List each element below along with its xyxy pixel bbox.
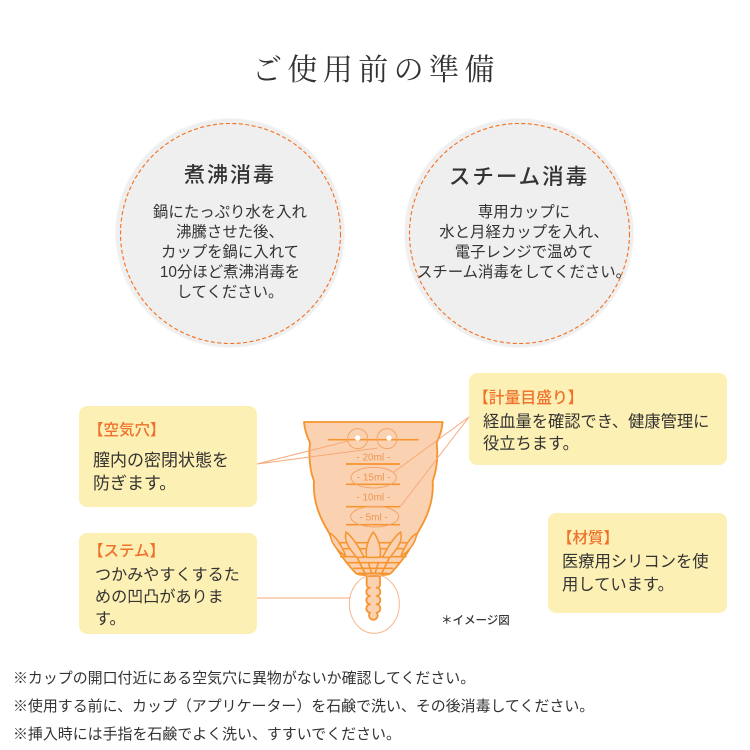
- measurement ovals: [351, 467, 399, 527]
- text: measurement description: 役立ちます。: [483, 435, 579, 453]
- text: air holes description: 膣内の密閉状態を: [93, 451, 229, 470]
- volume labels: - 10ml -: [356, 493, 390, 504]
- label: material: 【材質】: [557, 530, 619, 547]
- text: material description: 医療用シリコンを使: [562, 553, 709, 571]
- text: steam instructions: 専用カップに: [478, 204, 570, 221]
- volume labels: - 20ml -: [356, 453, 390, 464]
- stem: [366, 576, 380, 620]
- label: stem: 【ステム】: [88, 543, 165, 560]
- text: measurement description: 経血量を確認でき、健康管理に: [483, 413, 709, 431]
- text: steam instructions: 水と月経カップを入れ、: [439, 224, 609, 241]
- text: steam instructions: 電子レンジで温めて: [455, 244, 593, 261]
- volume marks: [328, 440, 419, 525]
- text: stem description: めの凹凸がありま: [95, 588, 224, 606]
- text: air holes description: [93, 451, 229, 493]
- title: ご使用前の準備: [252, 54, 500, 87]
- volume labels: [356, 453, 391, 524]
- text: boiling instructions: カップを鍋に入れて: [161, 244, 299, 261]
- text: boiling instructions: してください。: [177, 284, 283, 301]
- note 3: ※挿入時には手指を石鹸でよく洗い、すすいでください。: [13, 726, 401, 743]
- text: steam instructions: スチーム消毒をしてください。: [417, 264, 631, 281]
- text: boiling instructions: 鍋にたっぷり水を入れ: [153, 204, 307, 221]
- text: material description: 用しています。: [562, 576, 674, 594]
- text: measurement description: [483, 412, 709, 453]
- panel: boiling disinfection: [116, 119, 344, 347]
- panel: measurement marks: [469, 373, 727, 465]
- panel: air holes: [79, 406, 257, 507]
- grip rings: [340, 543, 407, 573]
- volume labels: - 15ml -: [357, 473, 391, 484]
- heading: boiling disinfection: 煮沸消毒: [184, 164, 276, 187]
- panel: material: [548, 513, 727, 613]
- text: boiling instructions: [153, 204, 307, 301]
- text: boiling instructions: 10分ほど煮沸消毒を: [160, 264, 300, 281]
- notes: [13, 670, 594, 743]
- text: boiling instructions: 沸騰させた後、: [176, 224, 284, 241]
- label: measurement marks: 【計量目盛り】: [473, 390, 584, 407]
- text: stem description: つかみやすくするた: [95, 566, 240, 584]
- stem oval: [349, 575, 399, 633]
- panel: steam disinfection: [405, 119, 633, 347]
- note 1: ※カップの開口付近にある空気穴に異物がないか確認してください。: [13, 670, 475, 687]
- leader lines: [257, 417, 469, 598]
- panel: stem: [79, 533, 257, 634]
- grip petals: [330, 532, 417, 557]
- cup body: [304, 422, 443, 575]
- text: material description: [562, 552, 709, 594]
- text: steam instructions: [417, 204, 631, 281]
- text: stem description: す。: [95, 610, 126, 628]
- text: stem description: [95, 566, 240, 628]
- volume labels: - 5ml -: [360, 513, 388, 524]
- text: air holes description: 防ぎます。: [93, 474, 176, 493]
- air holes: [348, 429, 397, 449]
- note 2: ※使用する前に、カップ（アプリケーター）を石鹸で洗い、その後消毒してください。: [13, 698, 594, 715]
- caption: image note: ＊イメージ図: [441, 615, 510, 627]
- label: air holes: 【空気穴】: [88, 422, 166, 439]
- heading: steam disinfection: スチーム消毒: [449, 165, 589, 189]
- diagram: menstrual cup: [256, 416, 470, 634]
